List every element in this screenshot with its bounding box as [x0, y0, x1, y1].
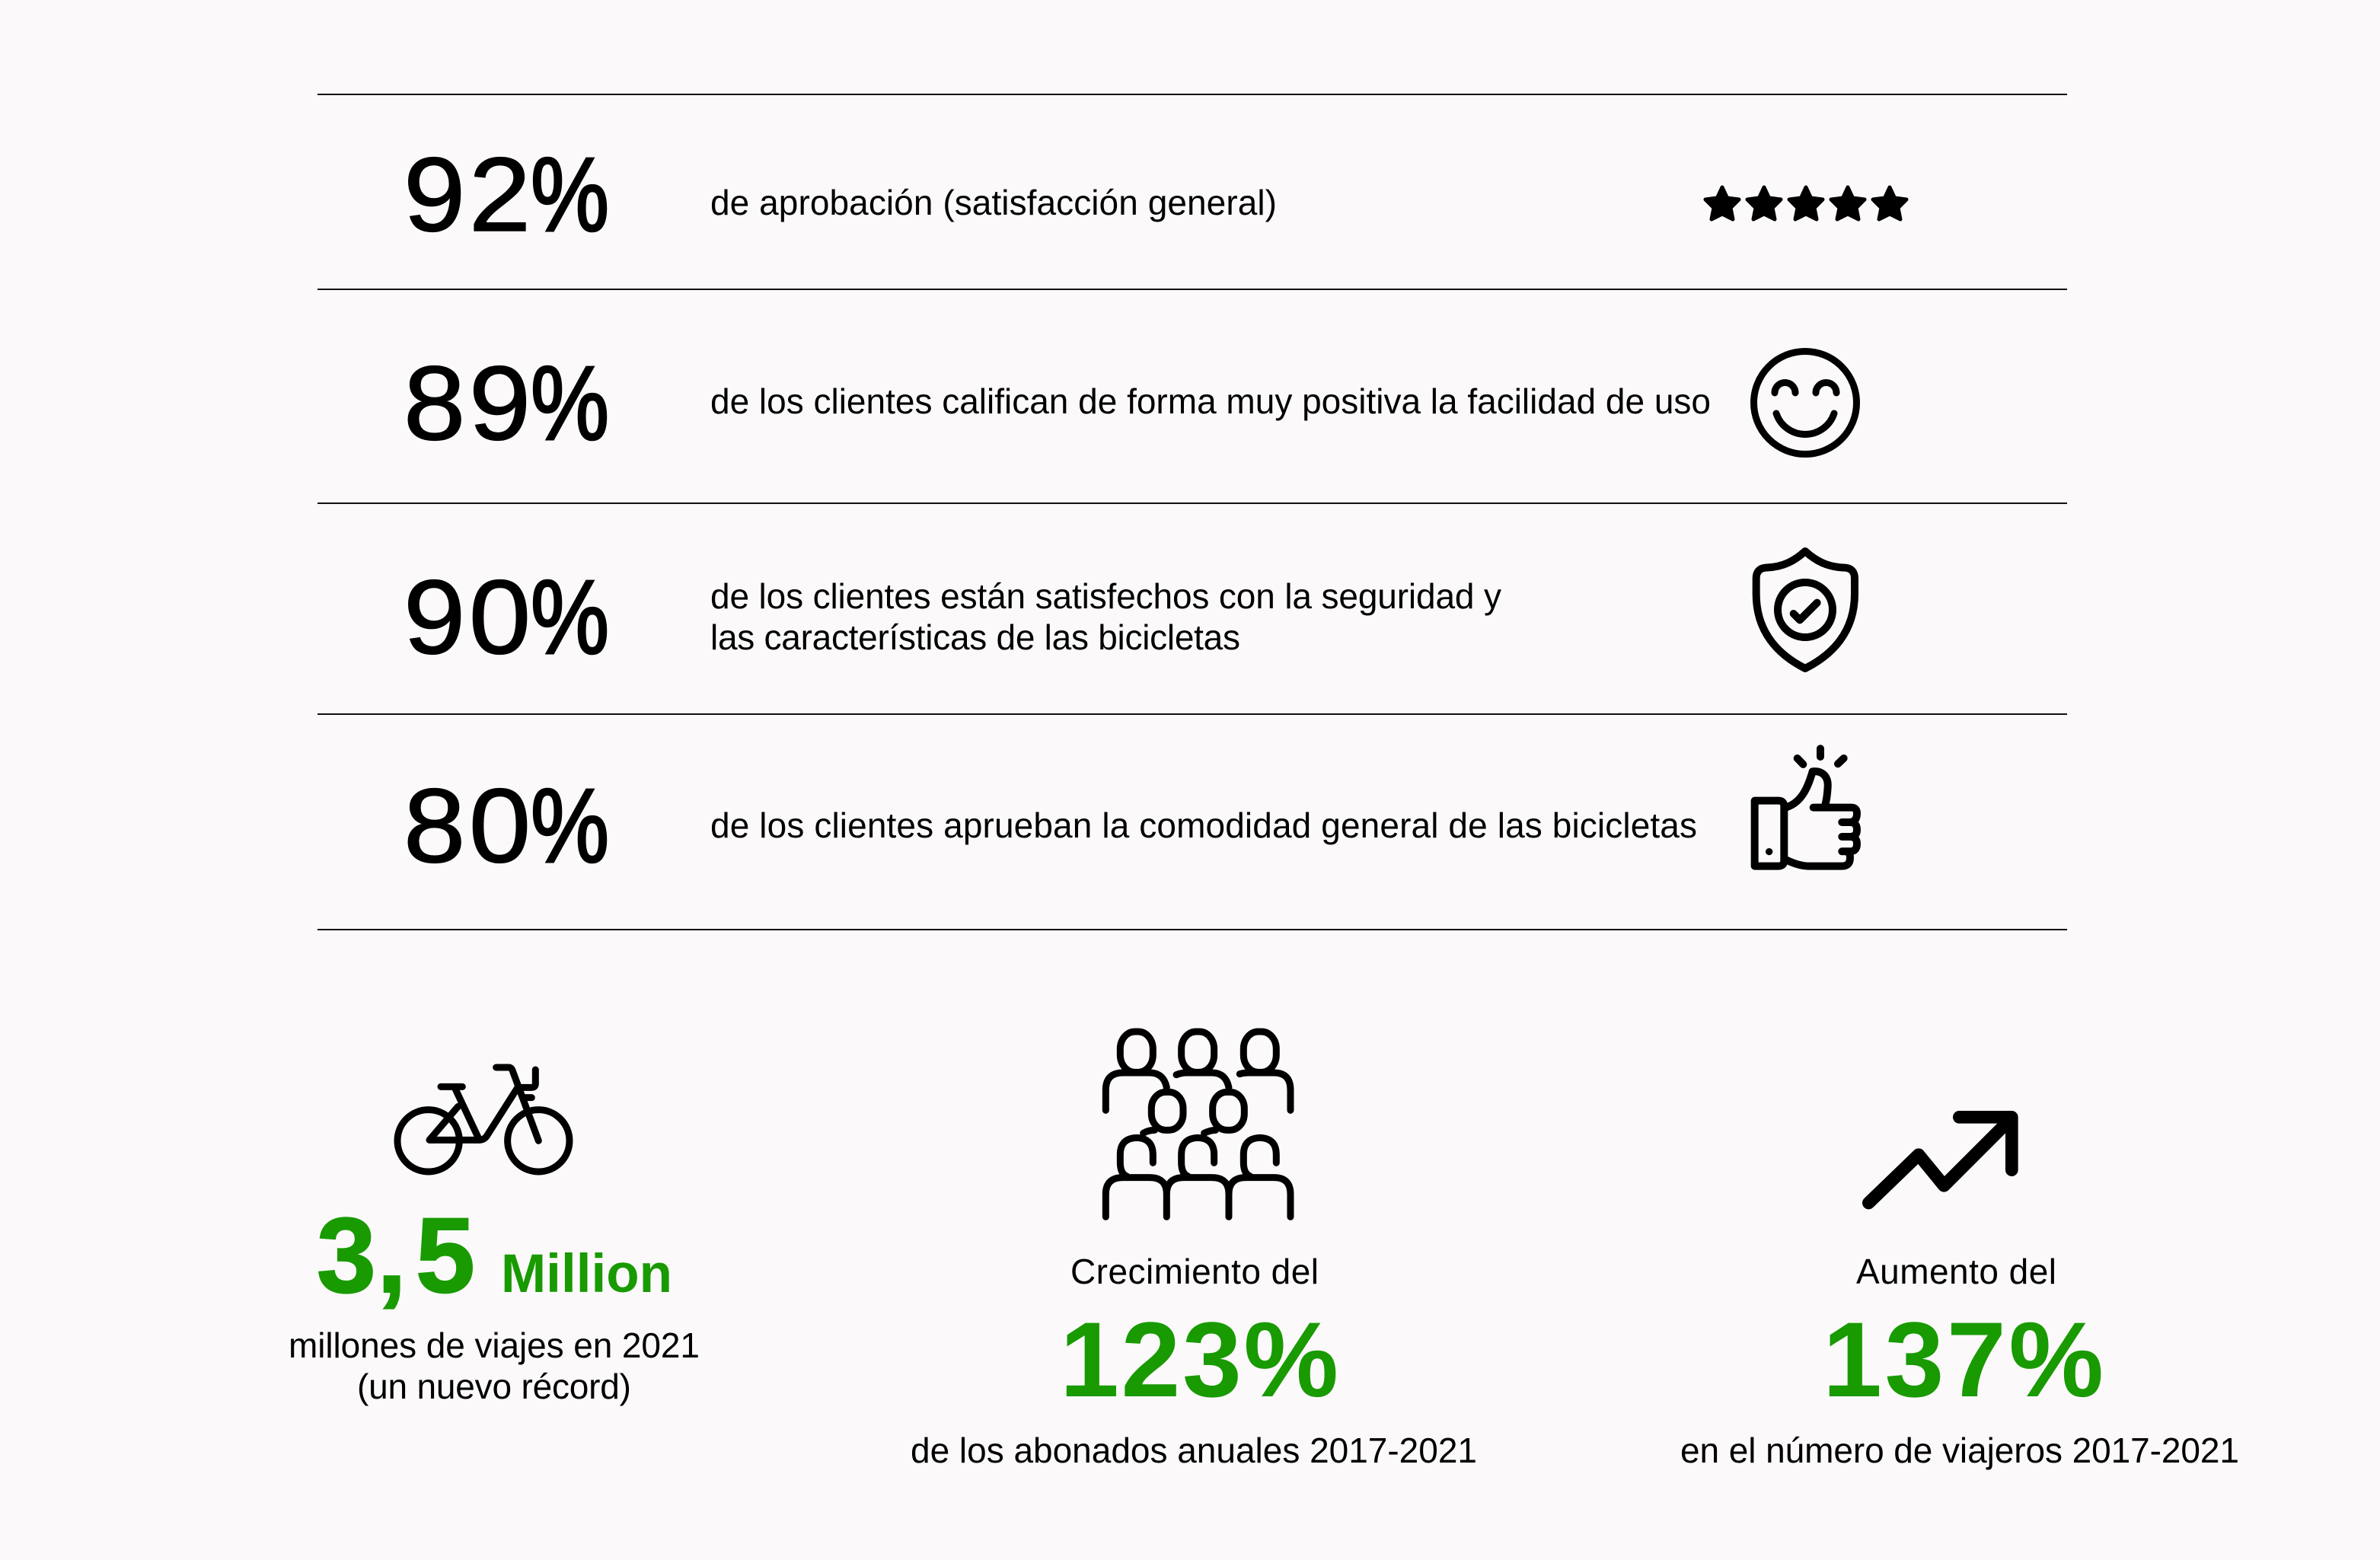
stat block: trips in 2021	[289, 1067, 700, 1406]
stat: 80%: %	[531, 768, 609, 885]
text: subscribers description: de los abonados anuales 2017-2021	[911, 1431, 1477, 1470]
text: safety description: las características de las bicicletas	[710, 617, 1240, 657]
icon: rising trend arrow	[1868, 1117, 2012, 1203]
stat block: annual subscribers	[911, 1032, 1477, 1470]
text: ease of use description: de los clientes califican de forma muy positiva la facilidad de uso	[710, 381, 1711, 421]
stat: 89%: 89	[404, 345, 531, 462]
stat: 92%: %	[531, 137, 609, 254]
text: trips description: millones de viajes en 2021	[289, 1326, 700, 1365]
text: comfort description: de los clientes aprueban la comodidad general de las bicicletas	[710, 806, 1697, 845]
text: trips description	[289, 1326, 700, 1406]
stat: 90%: %	[531, 560, 609, 676]
row: 90% safety	[404, 551, 1855, 676]
stat: 3,5 Million: Million	[501, 1244, 672, 1304]
row: 80% comfort	[404, 748, 1857, 885]
icon: five stars	[1705, 187, 1906, 219]
text: approval description: de aprobación (satisfacción general)	[710, 183, 1277, 222]
stat: 137%: 137%	[1823, 1300, 2104, 1419]
stat: 89%	[404, 345, 609, 462]
text: safety description	[710, 576, 1501, 657]
stat: 90%	[404, 559, 609, 676]
stat: 90%: 90	[404, 559, 531, 676]
icon: smiley face	[1754, 352, 1856, 454]
stat: 3,5 Million	[317, 1195, 672, 1315]
text: trips description: (un nuevo récord)	[357, 1367, 631, 1406]
row: 92% approval	[404, 136, 1906, 254]
icon: crowd of people	[1105, 1032, 1290, 1217]
text: growth label: Crecimiento del	[1070, 1252, 1319, 1291]
text: increase label: Aumento del	[1856, 1252, 2056, 1291]
icon: shield with check	[1756, 551, 1855, 668]
stat: 89%: %	[531, 346, 609, 462]
stat: 3,5 Million: 3,5	[317, 1195, 475, 1315]
stat: 80%	[404, 767, 609, 885]
text: riders description: en el número de viajeros 2017-2021	[1680, 1431, 2239, 1470]
stat block: riders	[1680, 1117, 2239, 1470]
text: safety description: de los clientes están satisfechos con la seguridad y	[710, 576, 1501, 616]
stat: 92%	[404, 136, 609, 254]
stat: 92%: 92	[404, 136, 531, 254]
icon: thumbs up	[1755, 748, 1857, 866]
icon: bicycle	[397, 1067, 569, 1172]
stat: 123%: 123%	[1060, 1300, 1338, 1419]
row: 89% ease of use	[404, 345, 1856, 462]
stat: 80%: 80	[404, 767, 531, 885]
